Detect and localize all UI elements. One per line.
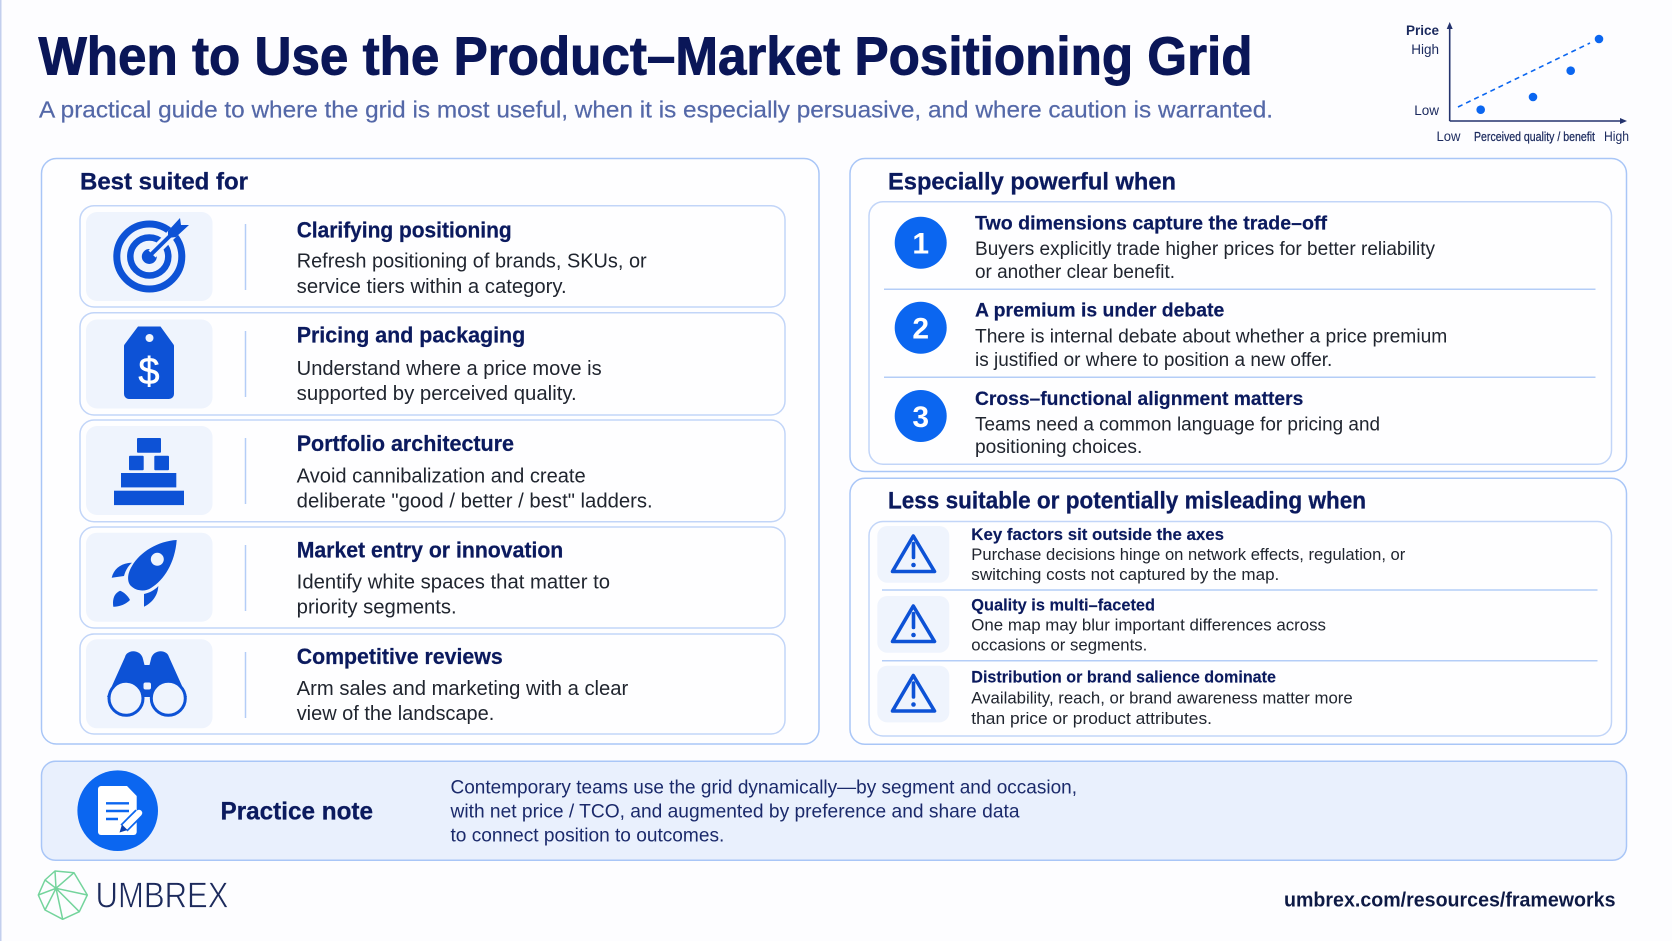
item 2: There is internal debate about whether a price premium: [975, 327, 1447, 348]
card: market entry or innovation: [80, 527, 785, 628]
item: key factors: Key factors sit outside the axes: [971, 525, 1224, 544]
icon: rocket: [112, 540, 177, 607]
text: portfolio architecture: [297, 431, 653, 512]
logo: umbrex: [38, 871, 228, 919]
item: key factors: switching costs not captured by the map.: [971, 565, 1279, 584]
text: market entry or innovation: priority segments.: [297, 597, 457, 619]
text: competitive reviews: [297, 644, 629, 725]
icon: stacked blocks: [114, 438, 184, 505]
badge 3: [895, 390, 947, 442]
card: pricing and packaging: [80, 313, 785, 415]
text: competitive reviews: view of the landscape.: [297, 703, 494, 725]
logo wordmark: UMBREX: [96, 875, 228, 916]
y axis label: Price: Price: [1406, 23, 1439, 38]
card: competitive reviews: [80, 634, 785, 734]
text: market entry or innovation: Identify white spaces that matter to: [297, 571, 610, 593]
icon: warning: [892, 676, 934, 711]
item: key factors: [877, 525, 1406, 584]
heading: especially powerful when: Especially powerful when: [888, 168, 1176, 195]
axes: [1447, 22, 1627, 124]
item: key factors: Purchase decisions hinge on network effects, regulation, or: [971, 545, 1406, 564]
text: market entry or innovation: [297, 537, 610, 619]
data points: [1476, 35, 1603, 114]
heading: best suited for: Best suited for: [80, 168, 248, 196]
subtitle: A practical guide to where the grid is most useful, when it is especially persuasive, and where caution is warranted.: [39, 96, 1273, 122]
text: practice note: [450, 776, 1077, 847]
badge 2: 2: [912, 312, 929, 346]
panel: especially powerful when: [850, 158, 1626, 472]
badge 2: [895, 302, 947, 354]
item: quality is multi-faceted: Quality is multi–faceted: [971, 596, 1155, 615]
text: clarifying positioning: Clarifying positioning: [297, 217, 512, 242]
text: pricing and packaging: [297, 323, 602, 405]
item: distribution or brand salience: Availability, reach, or brand awareness matter more: [971, 688, 1353, 707]
heading: practice note: Practice note: [220, 797, 373, 825]
text: pricing and packaging: Understand where a price move is: [297, 358, 602, 380]
item: quality is multi-faceted: One map may blur important differences across: [971, 616, 1326, 635]
panel: best suited for: [42, 158, 819, 744]
y axis label: Low: Low: [1414, 103, 1439, 118]
panel: practice note: [42, 761, 1626, 860]
icon: note and pencil: [77, 770, 158, 851]
item 2: is justified or where to position a new offer.: [975, 350, 1332, 371]
text: practice note: with net price / TCO, and augmented by preference and share data: [450, 800, 1020, 822]
icon: price tag: $: [138, 351, 160, 393]
badge 1: 1: [912, 228, 929, 260]
text: market entry or innovation: Market entry or innovation: [297, 537, 563, 562]
text: portfolio architecture: deliberate "good / better / best" ladders.: [297, 490, 653, 512]
icon: warning: [892, 536, 934, 572]
badge 3: 3: [912, 401, 929, 434]
item: distribution or brand salience: [877, 666, 1353, 728]
text: competitive reviews: Arm sales and marketing with a clear: [297, 678, 629, 700]
text: competitive reviews: Competitive reviews: [297, 644, 503, 669]
card: portfolio architecture: [80, 420, 785, 522]
text: pricing and packaging: supported by perceived quality.: [297, 383, 577, 405]
item 1: Buyers explicitly trade higher prices for better reliability: [975, 239, 1435, 260]
panel: less suitable or potentially misleading when: [850, 478, 1626, 744]
x axis label: High: High: [1604, 129, 1629, 144]
item: distribution or brand salience: Distribution or brand salience dominate: [971, 668, 1276, 687]
text: portfolio architecture: Portfolio architecture: [297, 431, 514, 456]
icon: price tag: [124, 326, 174, 399]
text: portfolio architecture: Avoid cannibalization and create: [297, 465, 586, 487]
item 3: [895, 388, 1380, 458]
card: warning list: [869, 522, 1612, 736]
item 2: [895, 300, 1447, 371]
title: When to Use the Product–Market Positioning Grid: [38, 26, 1252, 86]
x axis label: Low: Low: [1436, 129, 1461, 144]
item 3: Cross–functional alignment matters: [975, 388, 1303, 410]
badge 1: [895, 217, 947, 269]
card: clarifying positioning: [80, 206, 785, 307]
logo mark: [38, 871, 87, 919]
item: distribution or brand salience: than price or product attributes.: [971, 709, 1212, 728]
x axis label: Perceived quality / benefit: Perceived quality / benefit: [1474, 129, 1595, 144]
text: practice note: Contemporary teams use the grid dynamically—by segment and occasion,: [450, 776, 1077, 798]
card: numbered list: [869, 202, 1612, 464]
item 2: A premium is under debate: [975, 300, 1224, 322]
item 3: positioning choices.: [975, 437, 1142, 458]
footer url: umbrex.com/resources/frameworks: [1284, 890, 1616, 912]
trend line: [1458, 43, 1590, 107]
text: clarifying positioning: Refresh positioning of brands, SKUs, or: [297, 250, 647, 272]
item: quality is multi-faceted: [877, 596, 1326, 655]
item 1: or another clear benefit.: [975, 262, 1175, 283]
chart: price vs perceived quality: [1406, 22, 1629, 144]
text: clarifying positioning: service tiers within a category.: [297, 276, 567, 298]
text: pricing and packaging: Pricing and packaging: [297, 323, 525, 348]
icon: binoculars: [107, 651, 187, 715]
item 3: Teams need a common language for pricing and: [975, 415, 1380, 436]
text: practice note: to connect position to outcomes.: [450, 825, 724, 847]
text: clarifying positioning: [297, 217, 647, 298]
item 1: Two dimensions capture the trade–off: [975, 212, 1328, 234]
item 1: [895, 212, 1435, 283]
icon: warning: [892, 606, 934, 642]
icon: target: [117, 218, 189, 289]
item: quality is multi-faceted: occasions or segments.: [971, 636, 1147, 655]
heading: less suitable: Less suitable or potentially misleading when: [888, 487, 1366, 514]
y axis label: High: High: [1411, 42, 1439, 57]
